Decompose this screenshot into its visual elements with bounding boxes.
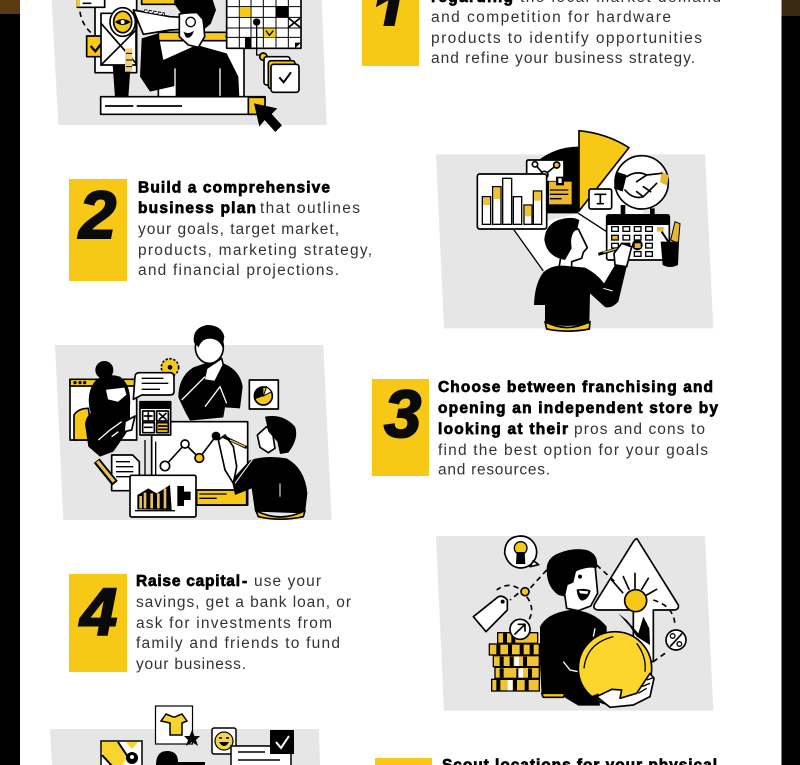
icon: map <box>101 741 142 765</box>
number badge 2: 2 <box>77 178 116 253</box>
text: step 1: and refine your business strategy. <box>431 50 695 67</box>
text: step 4: family and friends to fund <box>136 635 340 652</box>
icon: light bulb bubble <box>505 536 539 568</box>
icon: document with check <box>231 730 294 765</box>
text: step 3: opening an independent store by <box>438 400 718 417</box>
text: step 4: use your <box>254 573 321 590</box>
text: step 2: that outlines <box>260 200 360 217</box>
text: step 4: ask for investments from <box>136 615 332 632</box>
text: step 4: savings, get a bank loan, or <box>136 594 351 611</box>
illustration: raising capital <box>436 536 713 711</box>
top-right photo edge <box>781 0 800 16</box>
icon: emoji card <box>212 728 236 754</box>
text: step 2: your goals, target market, <box>138 221 339 238</box>
text: step 3: looking at their <box>438 421 568 438</box>
text: step 1: and competition for hardware <box>431 9 671 26</box>
text: step 3: Choose between franchising and <box>438 379 713 396</box>
icon: t-shirt card <box>156 706 200 746</box>
illustration: franchise or independent discussion <box>55 325 332 520</box>
illustration: business planning <box>436 131 713 331</box>
text: step 2: Build a comprehensive <box>138 180 330 196</box>
number badge 4 <box>69 574 127 672</box>
text: step 3 <box>438 379 718 478</box>
number badge 1 <box>362 0 419 66</box>
text: step 4: - <box>242 573 247 590</box>
text: step 4 <box>136 573 351 673</box>
top-left photo edge <box>0 0 20 14</box>
number badge 3 <box>372 377 429 476</box>
text: step 3: find the best option for your goals <box>438 442 708 459</box>
number badge 2 <box>69 178 127 281</box>
illustration: market research with telescope <box>52 0 327 132</box>
text: step 1: products to identify opportunities <box>431 30 702 47</box>
number badge 3: 3 <box>384 377 421 452</box>
number badge 5 <box>375 758 432 765</box>
person head <box>156 751 205 765</box>
text: step 1 <box>431 0 721 67</box>
text: step 2 <box>138 180 372 279</box>
text: step 4: your business. <box>136 656 246 673</box>
text: step 3: and resources. <box>438 462 550 478</box>
text: step 2: business plan <box>138 200 256 217</box>
text: step 3: pros and cons to <box>574 421 705 438</box>
text: step 4: Raise capital <box>136 573 240 590</box>
illustration: scout locations <box>50 706 320 765</box>
text: step 2: products, marketing strategy, <box>138 242 372 259</box>
number badge 4: 4 <box>78 575 117 650</box>
text: step 2: and financial projections. <box>138 262 339 279</box>
